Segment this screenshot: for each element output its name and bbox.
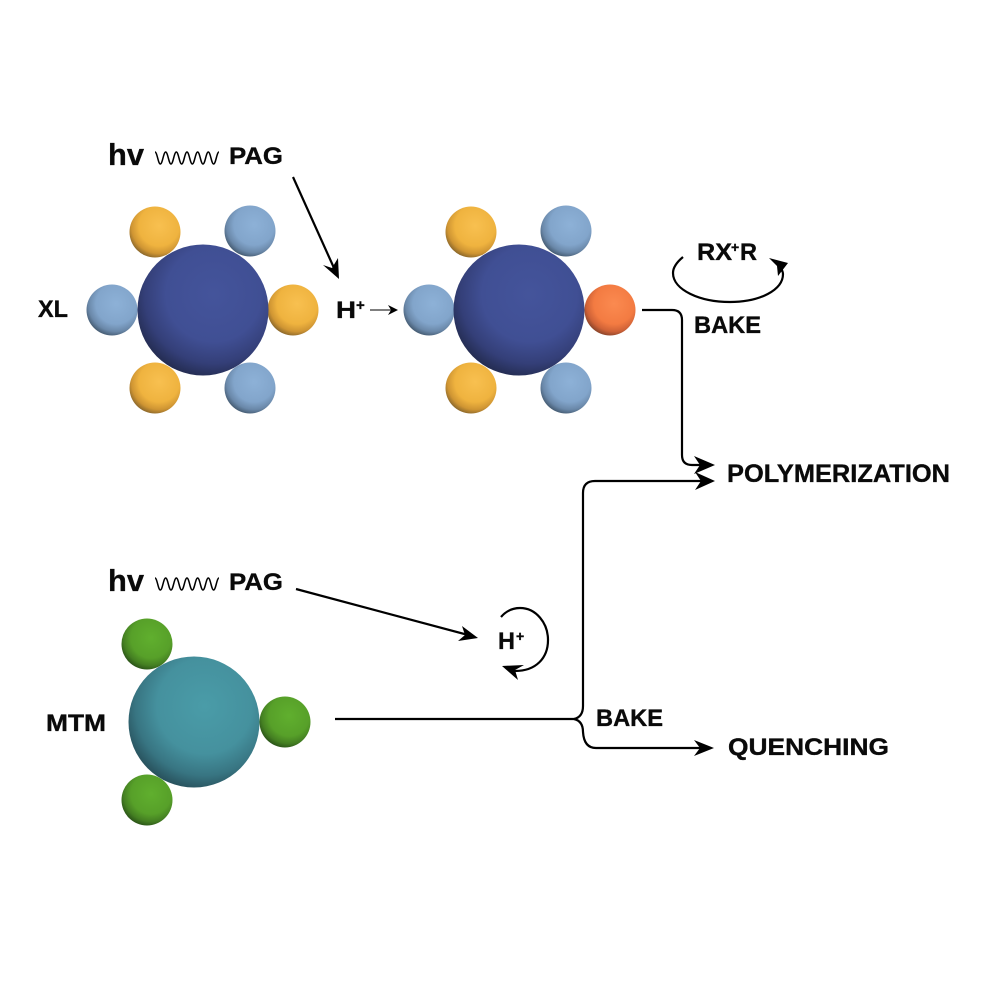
- label: MTM: MTM: [46, 710, 106, 737]
- label: H+: H: [336, 297, 356, 324]
- label: RX+R: [697, 239, 757, 266]
- label: RX+R: RX: [697, 239, 732, 266]
- label: hv PAG lower: hv: [108, 563, 145, 598]
- connector: MTM to polymerization and quenching: [335, 472, 715, 756]
- label: BAKE lower: BAKE: [596, 705, 663, 732]
- molecule: activated XL: [404, 206, 636, 414]
- label: QUENCHING: QUENCHING: [728, 734, 889, 761]
- label: H+: +: [356, 297, 365, 314]
- arrow: H+ to molecule: [370, 305, 398, 315]
- molecule: XL: [86, 206, 318, 414]
- label: H+ lower: +: [516, 628, 524, 644]
- connector: orange site to polymerization: [642, 310, 715, 474]
- label: POLYMERIZATION: POLYMERIZATION: [727, 460, 950, 488]
- arrow: PAG to H+ lower: [296, 589, 478, 641]
- label: H+ lower: H: [498, 628, 515, 655]
- label: hv PAG lower: [108, 563, 283, 598]
- label: RX+R: R: [740, 239, 757, 266]
- top heading: hv PAG: hv: [108, 137, 145, 172]
- arrow: PAG to H+: [293, 177, 339, 279]
- top heading: hv PAG: [108, 137, 283, 172]
- label: RX+R: +: [731, 239, 739, 255]
- cycle arrow: H+ lower: [501, 608, 548, 680]
- label: H+ lower: [498, 628, 524, 655]
- label: XL: XL: [38, 296, 68, 323]
- label: hv PAG lower: PAG: [229, 569, 283, 596]
- label: BAKE top: BAKE: [694, 312, 761, 339]
- cycle arrow: RX+R: [673, 257, 788, 302]
- molecule: MTM: [122, 618, 310, 826]
- top heading: hv PAG: PAG: [229, 143, 283, 170]
- label: H+: [336, 297, 365, 324]
